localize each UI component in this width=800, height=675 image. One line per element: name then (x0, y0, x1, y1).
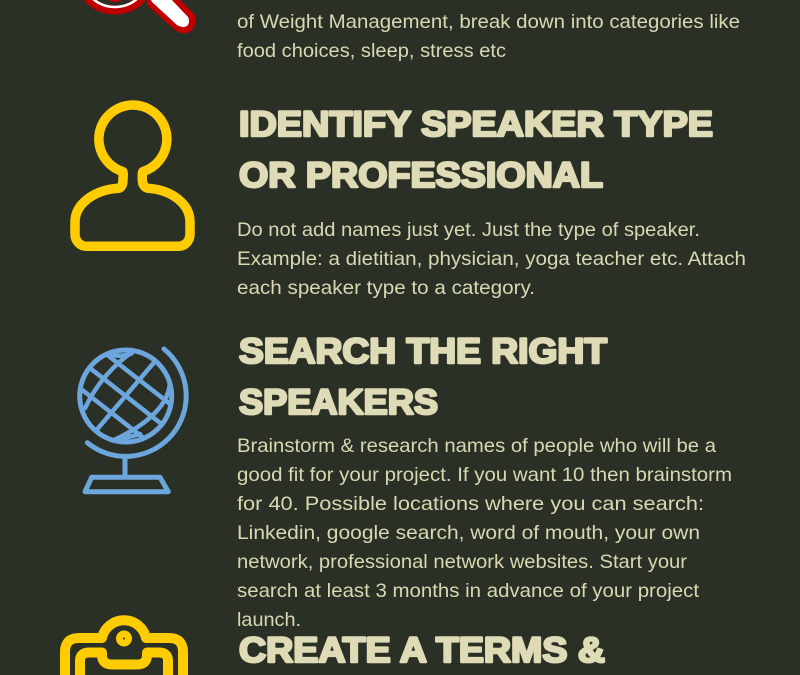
text: step 1 description: food choices, sleep, stress etc (237, 40, 506, 62)
heading: search the right speakers: SEARCH THE RIGHT (239, 332, 607, 371)
text: step 3 description: for 40. Possible locations where you can search: (237, 493, 704, 515)
text: step 3 description: Linkedin, google search, word of mouth, your own (237, 522, 700, 544)
heading: create a terms and: CREATE A TERMS & (239, 631, 605, 670)
text: step 2 description (237, 219, 746, 299)
text: step 3 description: launch. (237, 609, 301, 631)
icon: clipboard (65, 620, 183, 675)
text: step 2 description: Example: a dietitian, physician, yoga teacher etc. Attach (237, 248, 746, 270)
heading: identify speaker type: OR PROFESSIONAL (239, 156, 603, 195)
icon: person (75, 105, 190, 246)
text: step 2 description: Do not add names just yet. Just the type of speaker. (237, 219, 700, 241)
heading: search the right speakers: SPEAKERS (239, 383, 438, 422)
text: step 3 description (237, 435, 732, 631)
icon: globe (68, 345, 186, 492)
text: step 3 description: Brainstorm & research names of people who will be a (237, 435, 716, 457)
text: step 1 description: of Weight Management, break down into categories like (237, 11, 740, 33)
icon: magnifying glass (78, 0, 196, 33)
heading: identify speaker type (239, 105, 713, 195)
text: step 2 description: each speaker type to a category. (237, 277, 535, 299)
text: step 3 description: good fit for your project. If you want 10 then brainstorm (237, 464, 732, 486)
heading: search the right speakers (239, 332, 607, 422)
text: step 3 description: search at least 3 months in advance of your project (237, 580, 700, 602)
text: step 1 description (237, 11, 740, 62)
text: step 3 description: network, professional network websites. Start your (237, 551, 688, 573)
heading: identify speaker type: IDENTIFY SPEAKER TYPE (239, 105, 713, 144)
